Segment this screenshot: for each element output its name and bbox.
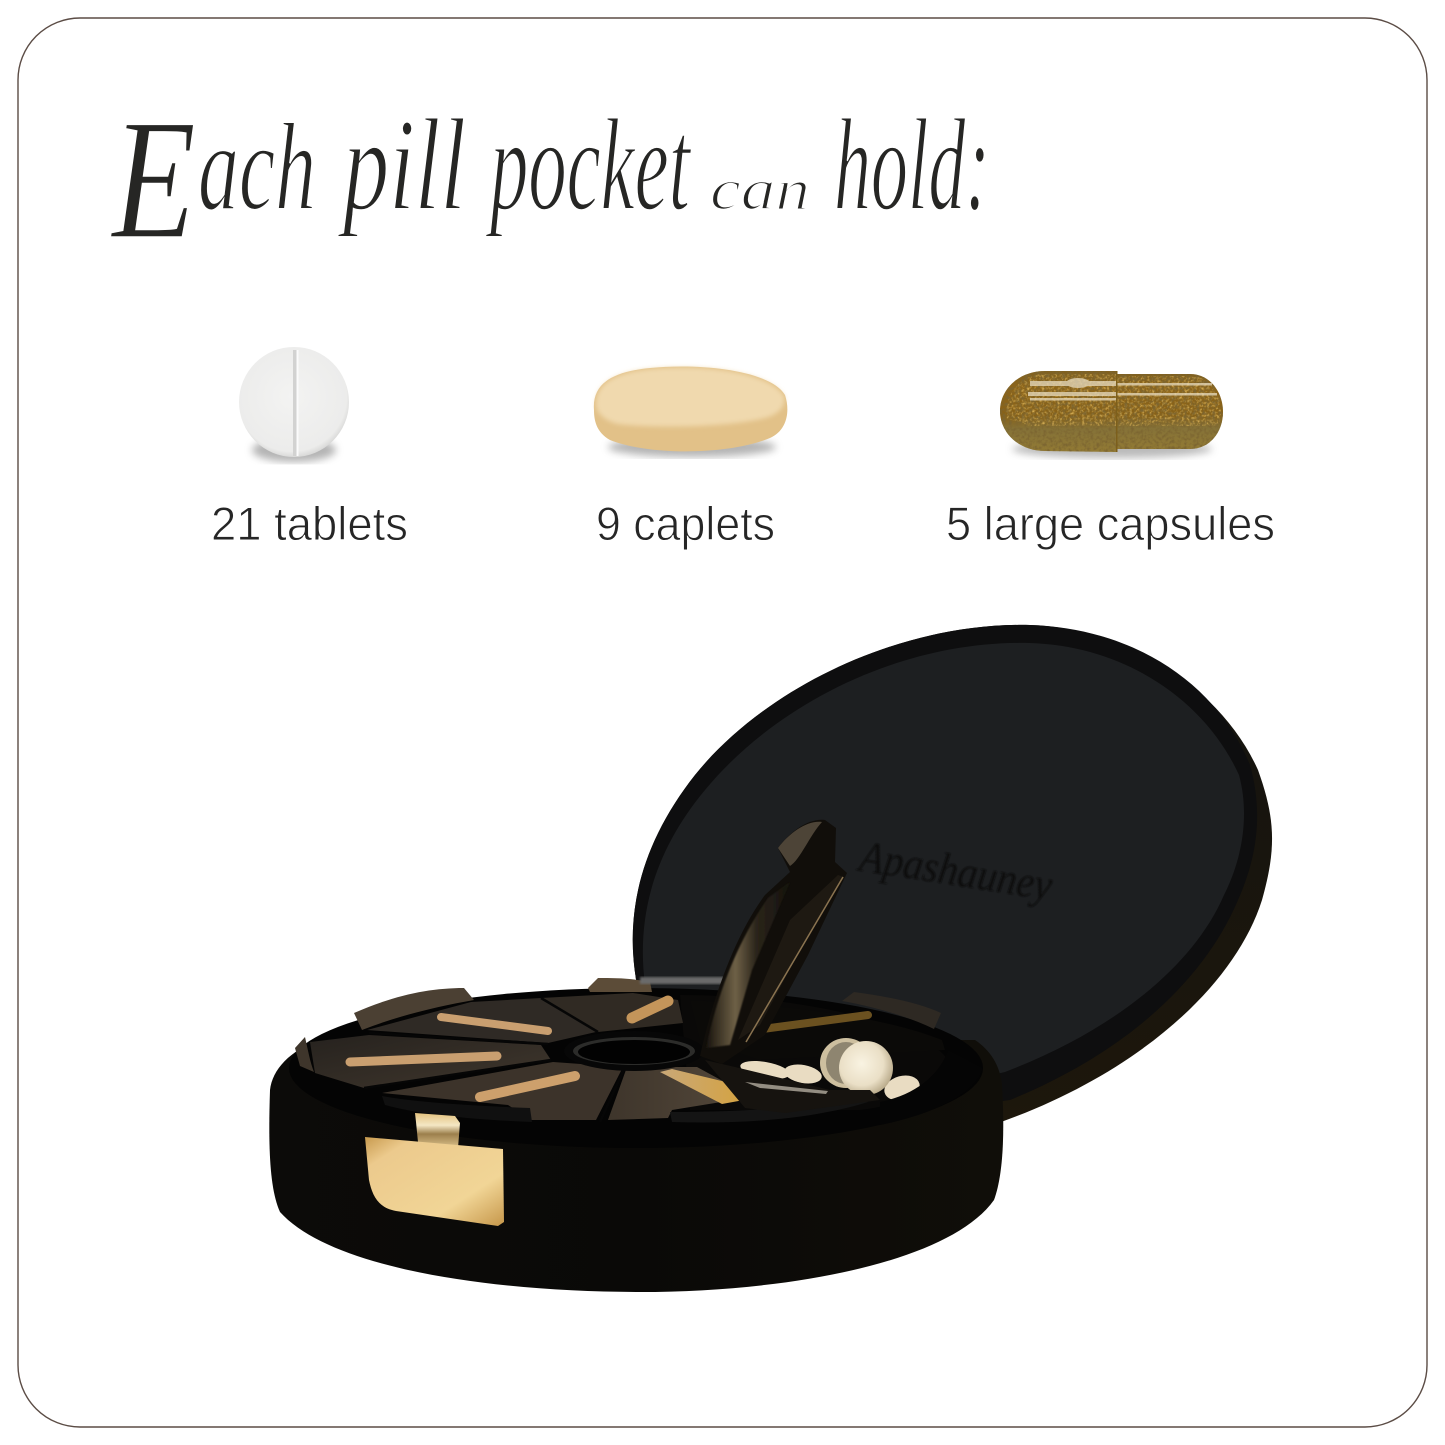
- rotating tray segments: [310, 993, 945, 1120]
- icon: round tablet: [239, 347, 349, 462]
- lid outer shell: [633, 625, 1272, 1130]
- title: pocket: [485, 93, 692, 238]
- lid rim: [633, 625, 1257, 1130]
- flap: open pocket door: [700, 820, 847, 1064]
- pocket tabs: [295, 977, 941, 1122]
- tray well: [680, 995, 948, 1110]
- segment: back: [541, 993, 683, 1032]
- pearl softgel: [839, 1041, 893, 1095]
- clasp: gold tab: [365, 1137, 504, 1226]
- label: pocket left: [350, 1056, 497, 1062]
- clip: gold hinge: [415, 1113, 460, 1148]
- segment: front left: [382, 1062, 623, 1120]
- label: 5 large capsules: 5 large capsules: [946, 497, 1275, 550]
- label: pocket front left: [480, 1076, 575, 1097]
- segment: front right: [608, 1067, 752, 1120]
- clear softgel: [820, 1038, 872, 1088]
- case base: [269, 1040, 1003, 1292]
- segment: back right: [690, 1000, 945, 1060]
- tab: back left: [354, 988, 474, 1030]
- label: pocket back right: [755, 1015, 868, 1030]
- tab: left: [295, 1037, 314, 1072]
- title: can: [710, 157, 810, 222]
- title: [110, 85, 990, 275]
- label: 21 tablets: 21 tablets: [211, 497, 408, 550]
- title: pill: [337, 93, 466, 238]
- icon: caplet: [594, 366, 787, 457]
- pills in open pocket: [739, 1038, 922, 1104]
- product: open pill case: [269, 625, 1272, 1292]
- label: pocket back: [632, 1001, 668, 1018]
- segment: left: [310, 1035, 551, 1088]
- segment: back left: [367, 998, 596, 1043]
- front-right pocket edge: [705, 1060, 880, 1113]
- gold pocket labels: [350, 1001, 868, 1097]
- tab: right: [842, 992, 941, 1029]
- strip: blurred highlight behind back tab: [640, 977, 725, 984]
- tab: front left: [382, 1096, 532, 1122]
- label: 9 caplets: 9 caplets: [596, 497, 775, 550]
- pocket divider lines: [364, 998, 625, 1122]
- small caplet pills: [739, 1058, 922, 1104]
- title: hold:: [834, 93, 990, 238]
- tab: back: [588, 978, 652, 992]
- lid: [633, 625, 1272, 1130]
- centre hub: [564, 1031, 704, 1071]
- tray rim: [289, 988, 983, 1148]
- title: ach: [198, 99, 316, 237]
- lid inner face: [643, 643, 1244, 1120]
- label: pocket back left: [441, 1017, 548, 1031]
- front-right tray rim over pills: [880, 1050, 983, 1125]
- label: pocket front right (mirrored gold): [660, 1069, 755, 1104]
- title: E: [110, 85, 196, 275]
- tab: front right: [670, 1095, 868, 1122]
- lid logo: Apashauney: [854, 831, 1056, 910]
- icon: capsule: [1000, 371, 1223, 458]
